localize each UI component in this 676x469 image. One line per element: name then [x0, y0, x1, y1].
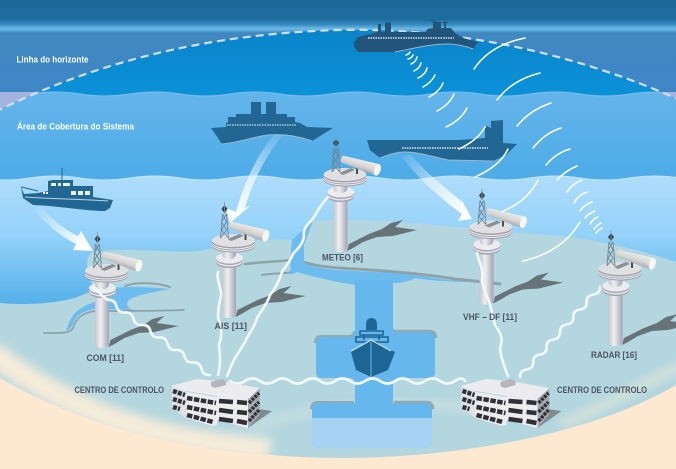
- background: sky band: [0, 0, 676, 110]
- dashed horizon line: [0, 30, 676, 112]
- arrow: liner to AIS: [226, 135, 283, 223]
- shipping basin: [312, 280, 435, 448]
- label: VHF-DF: VHF – DF [11]: [463, 312, 517, 323]
- data links: wavy white connections: [93, 197, 600, 384]
- panel: sea zones: [0, 92, 676, 240]
- zone: coastal water: [0, 176, 676, 240]
- river shadows on land: [44, 260, 500, 333]
- tower: METEO: [324, 136, 417, 252]
- ship: distant vessel on horizon: [354, 19, 478, 52]
- ship: small fishing boat: [21, 168, 113, 211]
- pale band along shore: [0, 352, 676, 450]
- sea beyond horizon dome: [0, 30, 676, 120]
- control centre building: left: [171, 379, 272, 428]
- label: control centre right: CENTRO DE CONTROLO: [557, 385, 647, 396]
- arrow: boat to COM: [34, 205, 93, 251]
- label: control centre left: CENTRO DE CONTROLO: [74, 385, 164, 396]
- label: COM: COM [11]: [86, 353, 124, 364]
- lower coastal water: [0, 240, 676, 310]
- label: METEO: METEO [6]: [322, 252, 363, 264]
- arrow: tanker to VHF-DF: [401, 155, 472, 221]
- zone: system coverage area: [0, 92, 676, 180]
- ship: cruise liner: [211, 102, 333, 144]
- label: RADAR: RADAR [16]: [591, 350, 637, 361]
- ship: front view in basin: [351, 318, 395, 377]
- tower: VHF-DF: [470, 188, 563, 304]
- sand beach: [0, 300, 676, 469]
- lower basin fade: [312, 418, 432, 448]
- heading: horizon line: Linha do horizonte: [16, 54, 88, 66]
- land: [0, 220, 676, 458]
- tower: AIS: [212, 202, 306, 318]
- basin edge shadows: [311, 331, 436, 409]
- heading: coverage area: Área de Cobertura do Sistema: [17, 122, 135, 132]
- inlet water: [66, 221, 470, 332]
- lavender horizon corners: [0, 92, 676, 112]
- label: AIS: AIS [11]: [214, 321, 247, 332]
- tower: RADAR: [598, 230, 676, 346]
- tower: COM: [85, 232, 178, 348]
- control centre building: right: [460, 379, 562, 428]
- ship: tanker: [367, 120, 517, 161]
- radio signal arcs: [406, 38, 602, 261]
